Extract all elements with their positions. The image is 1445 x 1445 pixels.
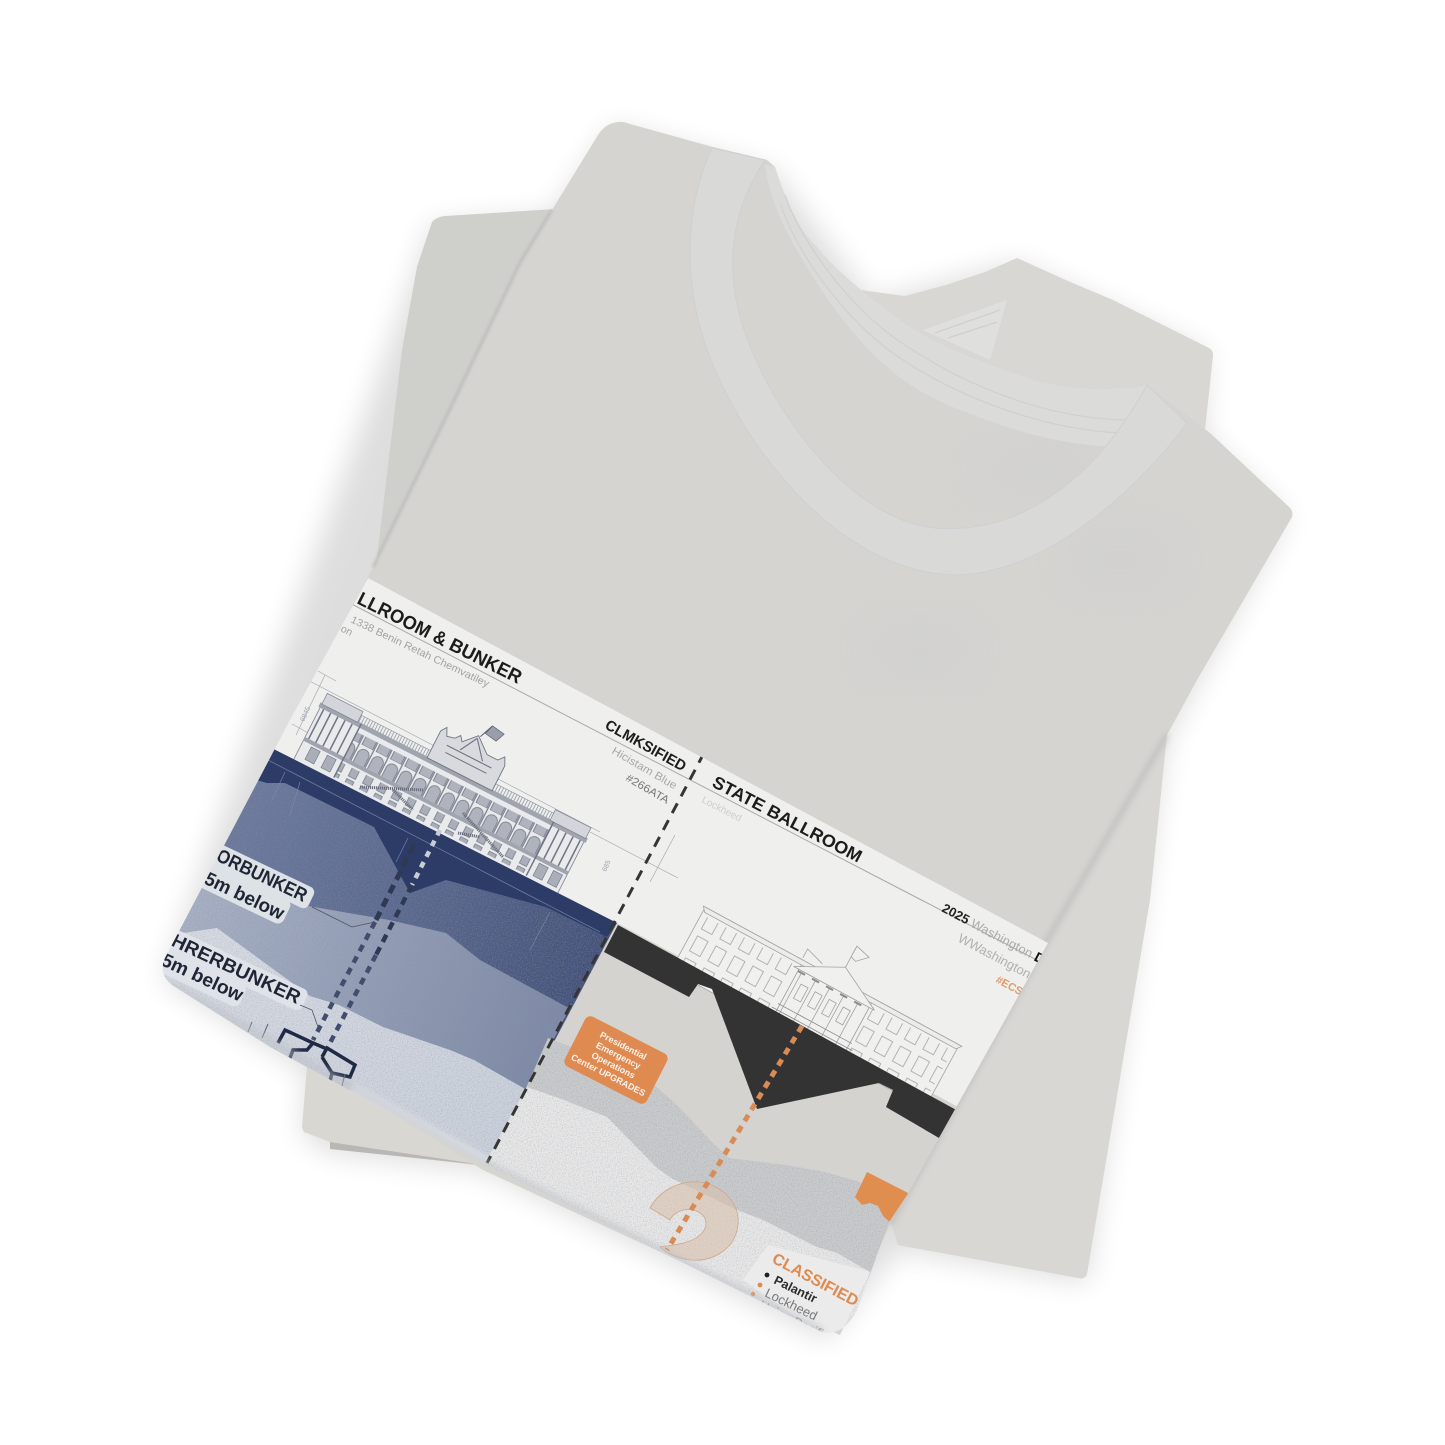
print edge shading [170,985,822,1332]
shirt mottling [860,448,1180,676]
address text left: on [339,623,355,639]
shirt back layer: right and lower fold [850,258,1240,1278]
fold shadows [373,210,1167,1225]
dark foundation band with inverted bunker [604,925,960,1138]
state section: pale sand layer [480,1087,870,1345]
navy underground band [258,750,617,937]
strata: middle layer [180,888,572,1088]
classified label left: Hicistam Blue [610,745,679,792]
lower edge highlight fold [350,1085,488,1164]
lockheed faint label: Lockheed [700,795,743,824]
bunker floor plan icon [248,1022,355,1086]
collar ribbed band [690,148,1187,575]
state address block: 2025 Washington D.C [940,900,1061,974]
classified label left: #266ATA [624,772,672,807]
building: palace blueprint [294,692,592,893]
shirt main front layer [163,122,1292,1335]
label: vorbunker: ORBUNKER [213,846,311,907]
header rule [340,598,1060,972]
badge: presidential emergency operations center: Operations [590,1050,637,1081]
printed artwork panel [162,578,1048,1332]
blueprint dimension marks: 6845 [299,706,312,723]
title: ballroom and bunker: LLROOM & BUNKER [354,589,525,689]
building: state ballroom elevation [678,906,963,1096]
address text left: 1338 Benin Retah Chemvatiley [349,614,492,690]
under fold: lower left [302,1050,500,1166]
label: fuhrerbunker: 5m below [158,950,247,1006]
leader line one [312,907,375,927]
bunker section: strata background [224,750,617,1040]
state section: mid sand layer [526,1038,889,1279]
back neck tape [923,300,1007,360]
badge: presidential emergency operations center: Presidential [598,1030,648,1062]
classified list panel: Union Pacific [757,1297,832,1344]
exterior staircases [360,787,503,857]
label: fuhrerbunker: HRERBUNKER [168,930,304,1009]
classified list panel: CLASSIFIED [769,1251,861,1310]
question-mark ring marker [650,1182,738,1260]
badge: presidential emergency operations center [562,1014,670,1106]
leader line two [300,1005,318,1027]
blueprint dimension marks [292,671,678,882]
shirt back layer: left sleeve fold [377,209,560,600]
state ballroom heading: STATE BALLROOM [709,772,866,866]
section divider dashed line [487,753,704,1163]
state address block [941,904,1042,994]
classified list panel: Lockheed [763,1285,820,1323]
classified list panel: Palantir [772,1273,819,1306]
state section background [554,923,956,1193]
classified label left [606,720,686,804]
navy dimension lines [268,760,600,950]
classified list panel [743,1246,870,1333]
state address block: #ECSS [994,974,1031,1002]
inner neck rib tape [765,165,1147,447]
print paper background [274,578,1048,1106]
t-shirt drop shadow [163,127,1288,1340]
classified label left: CLMKSIFIED [602,717,689,775]
label: vorbunker: 5m below [201,869,288,925]
badge: presidential emergency operations center: Center UPGRADES [569,1052,647,1098]
blueprint dimension marks: 685 [601,859,613,873]
orange block [855,1172,908,1222]
dashed shaft lines [313,830,440,1043]
badge: presidential emergency operations center: Emergency [594,1040,642,1071]
strata: pale lower layer [164,928,524,1164]
state address block: WWashington W [956,930,1048,989]
orange dashed shaft [667,1026,802,1250]
